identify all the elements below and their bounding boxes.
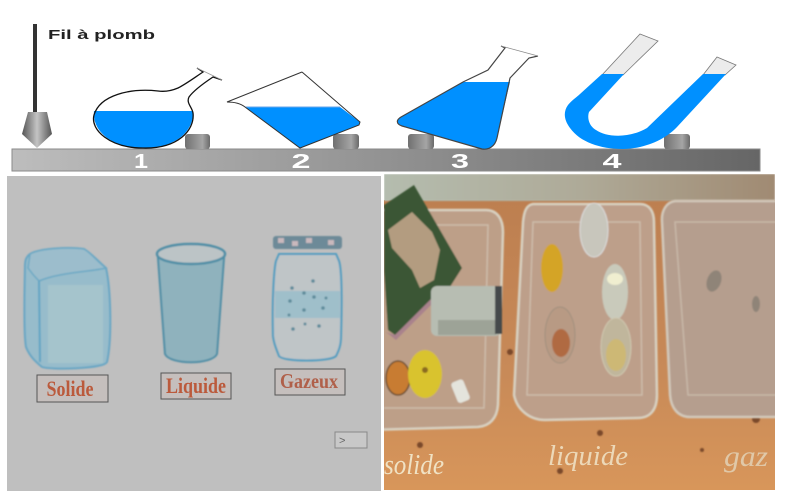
icon: round flask 1 xyxy=(93,68,222,148)
icon: tilted conical flask 3 xyxy=(397,46,538,149)
icon: tilted beaker 2 xyxy=(227,72,360,148)
tray: solids xyxy=(370,185,503,430)
label: Liquide: Liquide xyxy=(166,373,226,398)
tray: gas (empty) xyxy=(662,201,780,417)
icon: U tube 4 xyxy=(565,34,736,149)
glass: milk xyxy=(602,264,628,320)
book xyxy=(384,185,462,340)
tray: liquids xyxy=(514,203,657,420)
support bar xyxy=(12,149,760,171)
glass: water xyxy=(580,203,608,257)
icon: next button xyxy=(335,432,367,448)
panel: states of matter illustration xyxy=(7,176,381,491)
label: liquide: liquide xyxy=(548,441,628,472)
wall xyxy=(384,174,775,201)
apple xyxy=(408,350,442,398)
label: Gazeux: Gazeux xyxy=(280,369,338,393)
glass: syrup xyxy=(545,307,575,363)
glass: oil xyxy=(541,244,563,292)
number 4: 4 xyxy=(602,151,623,173)
glass: white wine xyxy=(601,318,631,376)
icon: next button: > xyxy=(339,435,345,447)
icon: plumb line xyxy=(22,24,52,148)
icon: glass of water xyxy=(157,244,225,362)
wood knots xyxy=(417,349,760,474)
icon: gas jar xyxy=(273,236,342,360)
icon: wedge blocks xyxy=(185,134,690,149)
label: plumb line caption: Fil à plomb xyxy=(48,27,155,42)
label: solide: solide xyxy=(384,450,444,481)
wood table xyxy=(384,200,775,490)
towel xyxy=(431,286,502,336)
number 3: 3 xyxy=(451,151,469,173)
icon: ice cube xyxy=(24,248,110,369)
label: gaz: gaz xyxy=(724,440,768,473)
label: Solide: Solide xyxy=(46,376,94,401)
panel: experiment diagram xyxy=(12,24,760,173)
number 2: 2 xyxy=(292,151,310,173)
panel: classroom photo xyxy=(370,174,780,490)
number 1: 1 xyxy=(134,151,148,173)
panel background xyxy=(7,176,381,491)
biscuit xyxy=(386,361,410,395)
chalk xyxy=(450,379,471,404)
